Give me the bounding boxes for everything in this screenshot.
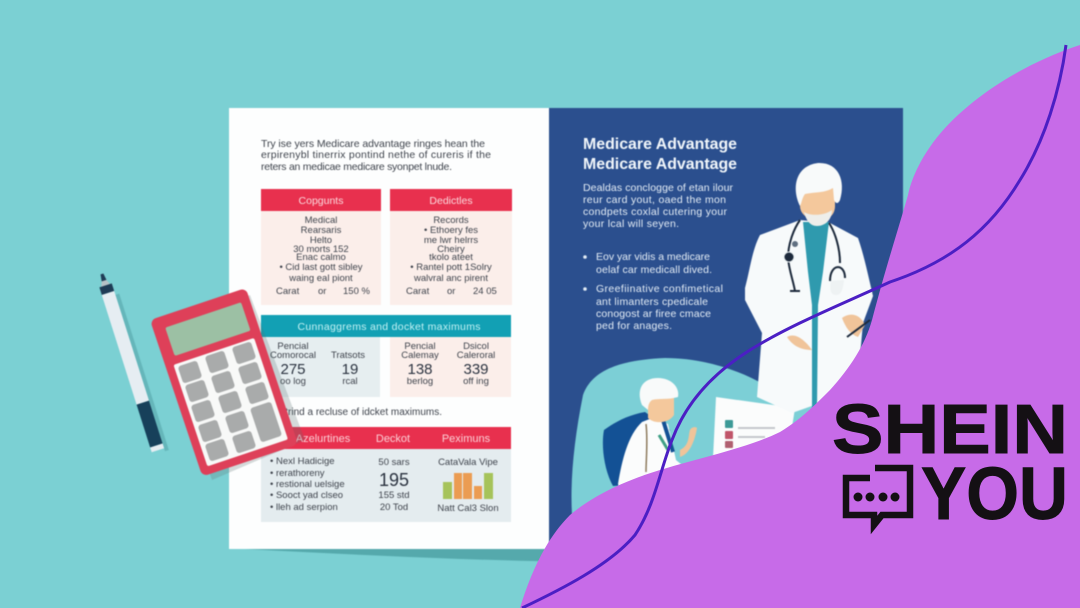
beard <box>804 210 832 226</box>
coat <box>618 418 682 490</box>
panel: maximums table <box>261 427 511 522</box>
panel: left page <box>229 108 549 549</box>
panel: coinsurance and out of pocket <box>261 315 511 397</box>
panel: coinsurance and out of pocket: Calemay <box>401 350 439 361</box>
panel: maximums table: • Sooct yad clseo <box>270 490 343 501</box>
panel: maximums table: Azelurtines <box>296 433 351 445</box>
panel: coinsurance and out of pocket: 275 <box>280 361 306 378</box>
face <box>648 392 674 422</box>
bullet list: ped for anages. <box>596 320 672 332</box>
sentence: Strind a recluse of idcket maximums. <box>279 407 442 418</box>
illustration: standing doctor <box>745 163 873 413</box>
panel: copayments: Enac calmo <box>296 252 346 263</box>
panel: coinsurance and out of pocket: Pencial <box>404 341 436 352</box>
logo <box>832 390 1068 535</box>
bullet list: oelaf car medicall dived. <box>596 264 712 276</box>
panel: deductibles: Carat <box>406 286 430 297</box>
panel: coinsurance and out of pocket: off ing <box>463 376 489 387</box>
bullet list <box>583 251 723 332</box>
panel: coinsurance and out of pocket: Pencial <box>277 341 309 352</box>
heading: Medicare Advantage <box>583 156 737 173</box>
panel: copayments: 150 % <box>343 286 370 297</box>
panel: coinsurance and out of pocket: Tratsots <box>331 350 365 361</box>
scrubs <box>803 222 829 410</box>
badge <box>792 241 798 247</box>
paragraph: your lcal will seyen. <box>583 218 679 230</box>
paragraph: reur card yout, oaed the mon <box>583 194 726 206</box>
face <box>800 185 835 222</box>
panel: maximums table: 20 Tod <box>380 502 408 513</box>
panel: maximums table: Natt Cal3 Slon <box>437 503 499 514</box>
hair <box>640 378 678 410</box>
panel: coinsurance and out of pocket: rcal <box>342 376 358 387</box>
bullet list: Eov yar vidis a medicare <box>596 251 710 263</box>
panel: maximums table: 195 <box>379 470 409 490</box>
illustration: seated doctor <box>571 358 850 515</box>
panel: copayments: 30 morts 152 <box>293 244 349 255</box>
panel: coinsurance and out of pocket: Comorocal <box>270 350 316 361</box>
bullet list: ant limanters cpedicale <box>596 296 708 308</box>
panel: deductibles <box>390 189 512 305</box>
icon: pen <box>96 271 169 455</box>
panel: right page <box>549 108 903 549</box>
hair <box>796 163 842 206</box>
brochure <box>96 108 903 562</box>
intro text: reters an medicae medicare syonpet lnude. <box>261 161 452 173</box>
panel: coinsurance and out of pocket: oo log <box>280 376 306 387</box>
paragraph: condpets coxlal cutering your <box>583 206 728 218</box>
panel: copayments <box>261 189 381 305</box>
page shadow <box>245 549 575 562</box>
icon: calculator <box>150 288 305 480</box>
panel: maximums table: 155 std <box>378 490 410 501</box>
paragraph: Dealdas conclogge of etan ilour <box>583 182 734 194</box>
panel: maximums table: Peximuns <box>442 433 491 445</box>
panel: deductibles: • Ethoery fes <box>424 225 478 236</box>
calculator keys <box>178 341 282 462</box>
panel: deductibles: or <box>447 286 455 297</box>
intro text: erpirenybl tinerrix pontind nethe of cureris if the <box>261 149 491 161</box>
panel: copayments: Carat <box>276 286 300 297</box>
panel: copayments: or <box>318 286 326 297</box>
panel: deductibles: Dedictles <box>429 195 473 207</box>
panel: copayments: • Cid last gott sibley <box>279 262 363 273</box>
panel: deductibles: me lwr helrrs <box>424 235 478 246</box>
panel: copayments: waing eal piont <box>288 273 353 284</box>
bullet list: Greefiinative confimetical <box>596 283 723 295</box>
heading: Medicare Advantage <box>583 136 737 153</box>
panel: coinsurance and out of pocket: 19 <box>342 361 358 378</box>
logo word: YOU: YOU <box>921 452 1068 535</box>
panel: maximums table: • lleh ad serpion <box>270 502 338 513</box>
panel: deductibles: 24 05 <box>473 286 497 297</box>
panel: deductibles: • Rantel pott 1Solry <box>410 262 492 273</box>
pen in hand <box>847 320 870 337</box>
panel: coinsurance and out of pocket: 339 <box>463 361 489 378</box>
panel: maximums table: Deckot <box>376 433 410 445</box>
panel: coinsurance and out of pocket: berlog <box>407 376 433 387</box>
panel: maximums table: 50 sars <box>378 457 410 468</box>
panel: copayments: Helto <box>310 235 332 246</box>
panel: copayments: Rearsaris <box>301 225 342 236</box>
panel: coinsurance and out of pocket: Dsicol <box>463 341 489 352</box>
panel: maximums table: CataVala Vipe <box>438 457 498 468</box>
curved line <box>522 45 1066 608</box>
panel: coinsurance and out of pocket: 138 <box>407 361 433 378</box>
chair <box>603 412 670 486</box>
illustration: clipboard <box>713 397 795 458</box>
panel: deductibles: Cheiry <box>437 244 465 255</box>
intro text <box>261 138 491 173</box>
raised hand <box>680 427 697 457</box>
panel: coinsurance and out of pocket: Caleroral <box>457 350 495 361</box>
bar chart <box>443 473 493 499</box>
stethoscope disc <box>784 252 794 262</box>
panel: maximums table: • restional uelsige <box>270 479 345 490</box>
stethoscope tube <box>830 280 844 295</box>
panel: copayments: Medical <box>305 215 337 226</box>
intro text: Try ise yers Medicare advantage ringes hean the <box>261 138 485 150</box>
panel: copayments: Copgunts <box>299 195 343 207</box>
stethoscope <box>788 220 845 291</box>
logo word: SHEIN: SHEIN <box>832 390 1068 468</box>
decorative purple shape <box>520 45 1080 608</box>
logo icon: chat bubble <box>846 468 910 525</box>
paragraph <box>583 182 734 230</box>
panel: maximums table: • rerathoreny <box>270 468 325 479</box>
hands <box>787 335 812 350</box>
panel: maximums table: • Nexl Hadicige <box>270 456 335 467</box>
panel: deductibles: tkolo ateet <box>429 252 473 263</box>
bullet list: conogost ar firee cmace <box>596 308 711 320</box>
panel: deductibles: walvral anc pirent <box>413 273 488 284</box>
coat <box>745 220 873 413</box>
panel: coinsurance and out of pocket: Cunnaggrems and docket maximums <box>298 321 480 333</box>
panel: deductibles: Records <box>433 215 469 226</box>
heading <box>583 136 737 173</box>
